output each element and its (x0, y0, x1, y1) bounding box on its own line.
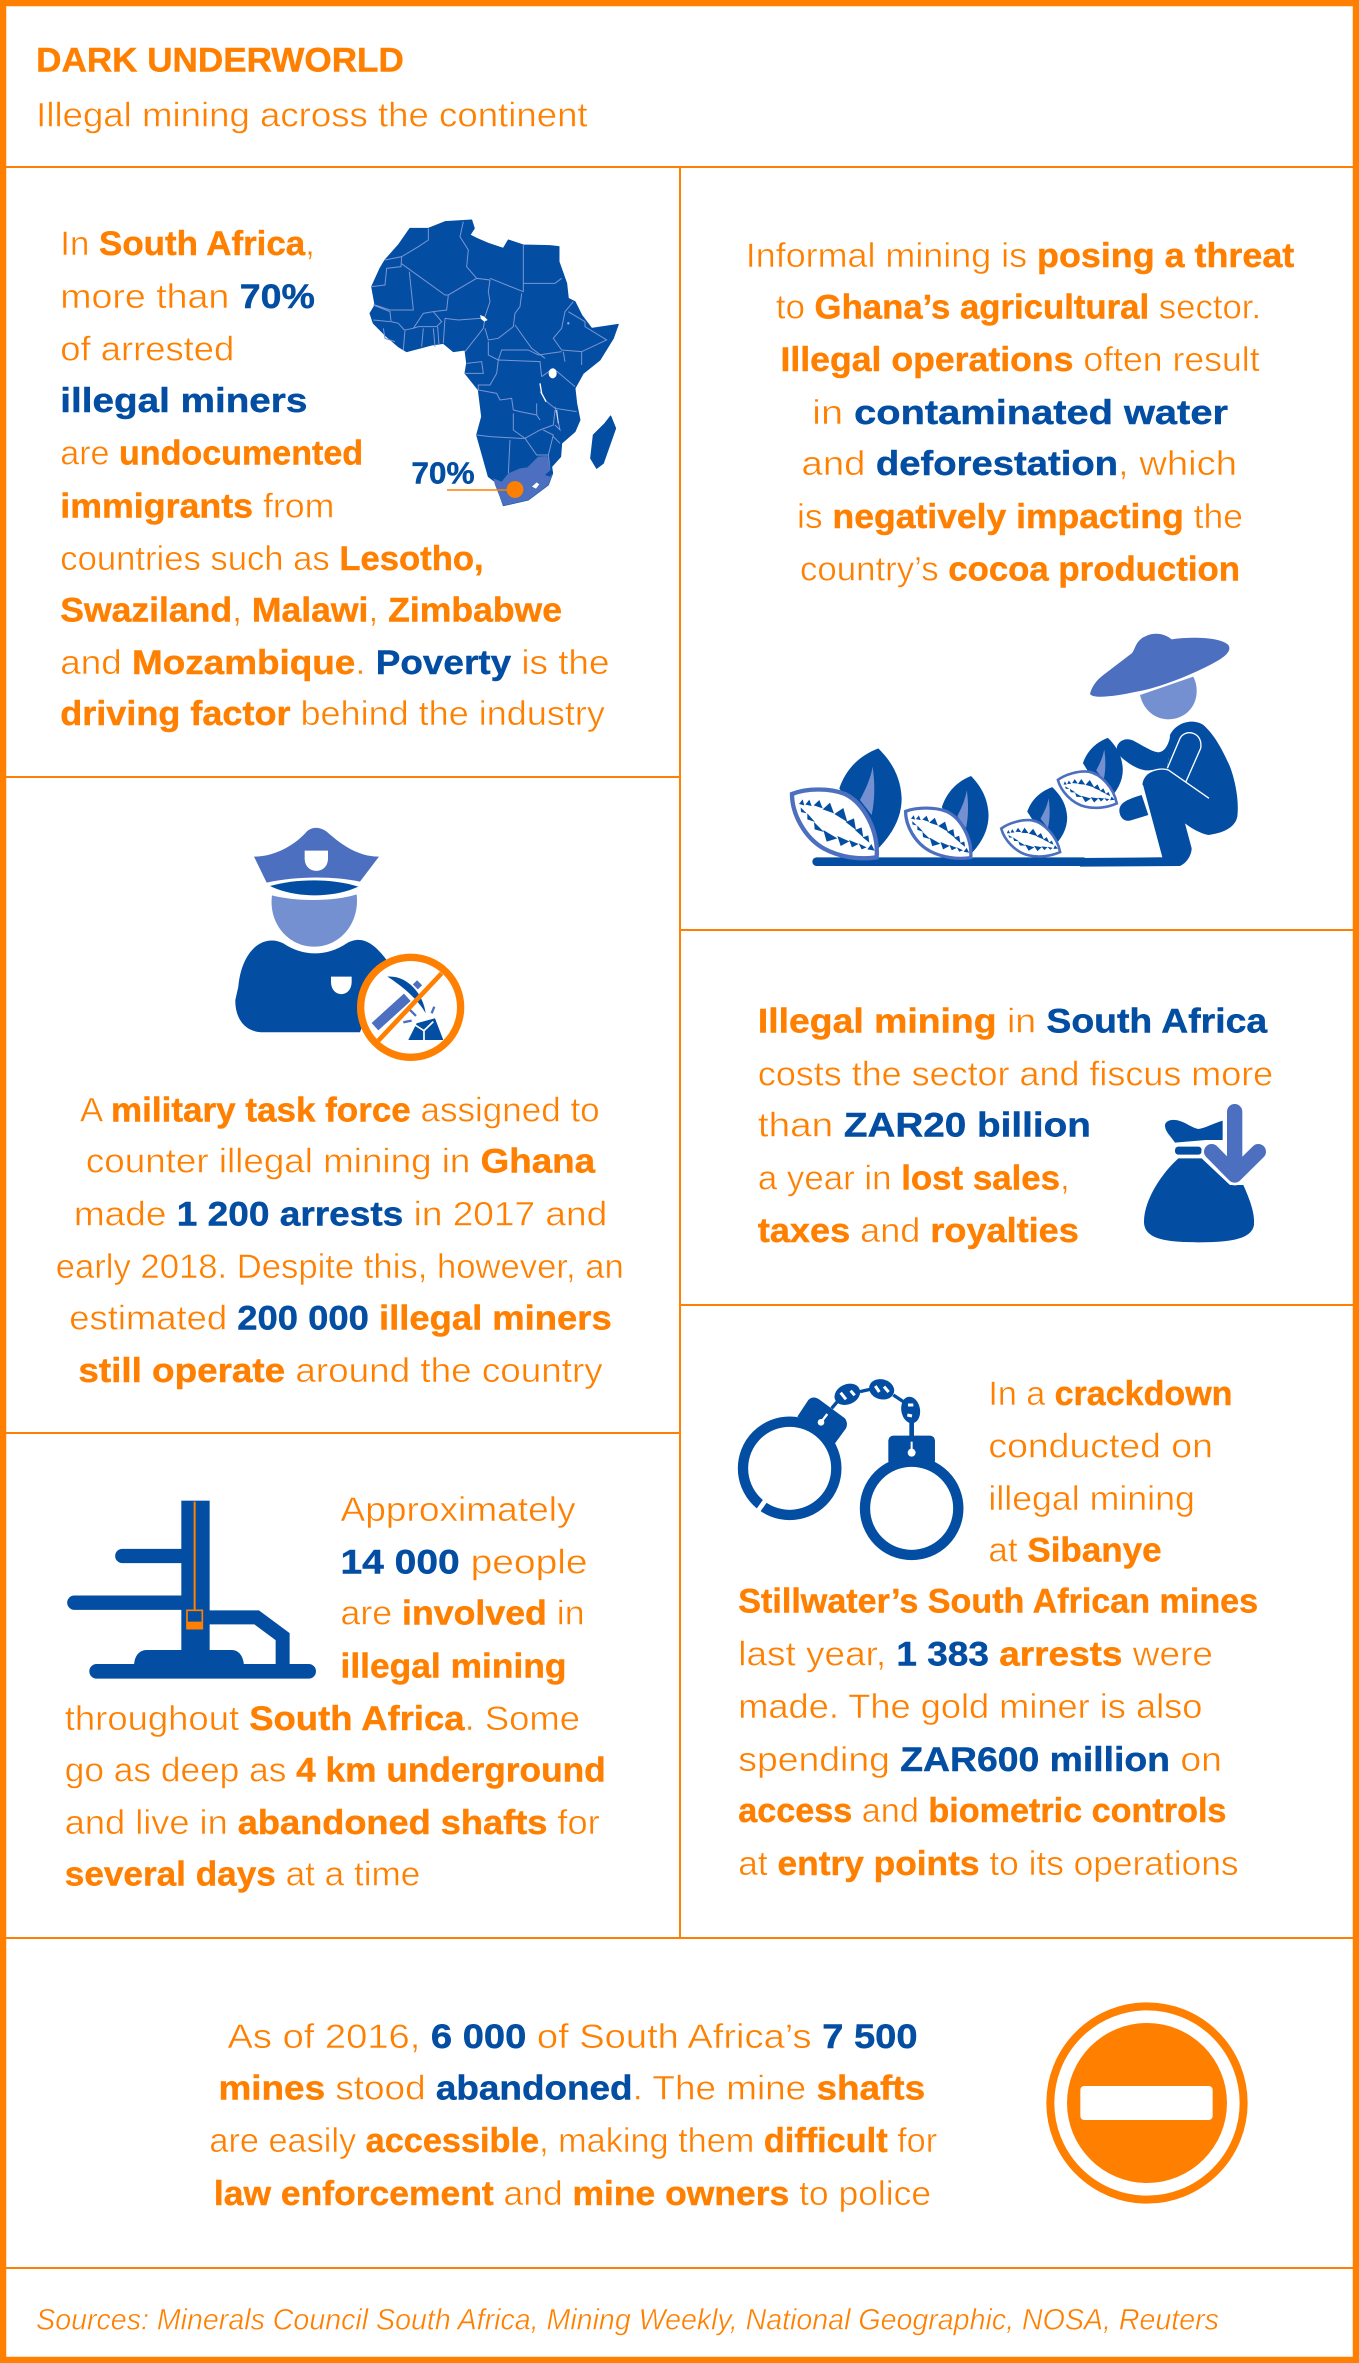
text block: 14 000 people illegal mining (65, 1491, 606, 1893)
text block: Sibanye Stillwater crackdown: illegal mining (988, 1480, 1195, 1518)
icon: crossed-out pickaxe (361, 957, 461, 1057)
icon: mine lift (187, 1502, 202, 1629)
title (36, 42, 588, 135)
text block: Ghana agriculture threat: Informal mining is posing a threat (746, 237, 1294, 275)
text block: Sibanye Stillwater crackdown: conducted on (988, 1427, 1213, 1465)
text block: abandoned mines: mines stood abandoned . The mine shafts (218, 2069, 925, 2107)
icon: down arrow (1212, 1112, 1258, 1175)
icon: handcuffs (743, 1379, 958, 1555)
text block: 14 000 people illegal mining: go as deep as 4 km underground (65, 1751, 606, 1789)
text block: Sibanye Stillwater crackdown: at entry points to its operations (738, 1845, 1239, 1883)
text block: South Africa undocumented immigrants: immigrants from (60, 487, 334, 525)
title: Illegal mining across the continent (36, 97, 588, 135)
text block: 14 000 people illegal mining: are involved in (341, 1595, 585, 1633)
text block: Ghana agriculture threat: to Ghana’s agricultural sector. (776, 288, 1261, 326)
text block: South Africa undocumented immigrants: and Mozambique . Poverty is the (60, 644, 609, 682)
text block: ZAR20 billion cost: taxes and royalties (758, 1212, 1079, 1250)
text block: South Africa undocumented immigrants: more than 70% (60, 278, 315, 316)
icon: mine shaft (74, 1501, 309, 1671)
text block: Sibanye Stillwater crackdown: spending ZAR600 million on (738, 1741, 1222, 1779)
text block: military task force Ghana: A military task force assigned to (80, 1091, 600, 1129)
text block: Sibanye Stillwater crackdown: made. The gold miner is also (738, 1688, 1202, 1726)
text block: South Africa undocumented immigrants: of arrested (60, 331, 234, 369)
text block: 14 000 people illegal mining: and live in abandoned shafts for (65, 1804, 600, 1842)
callout: 70% marker (411, 458, 523, 498)
title: DARK UNDERWORLD (36, 42, 404, 80)
icon: farmer figure (1080, 634, 1238, 867)
text block: ZAR20 billion cost: Illegal mining in South Africa (758, 1003, 1268, 1041)
text block: Sibanye Stillwater crackdown: access and biometric controls (738, 1792, 1226, 1830)
text block: military task force Ghana: early 2018. Despite this, however, an (56, 1248, 624, 1286)
text block: 14 000 people illegal mining: illegal mining (341, 1647, 567, 1685)
text block: military task force Ghana: still operate around the country (78, 1352, 603, 1390)
text block: abandoned mines: are easily accessible, making them difficult for (209, 2122, 937, 2160)
text block: ZAR20 billion cost: than ZAR20 billion (758, 1107, 1091, 1145)
text block: military task force Ghana (56, 1091, 624, 1390)
text block: Sibanye Stillwater crackdown: In a crackdown (988, 1375, 1232, 1413)
text block: ZAR20 billion cost (758, 1003, 1273, 1250)
text block: South Africa undocumented immigrants: Swaziland , Malawi, Zimbabwe (60, 591, 562, 629)
text block: Sibanye Stillwater crackdown: Stillwater’s South African mines (738, 1583, 1258, 1621)
icon: cocoa farmer (792, 634, 1238, 867)
text block: Ghana agriculture threat: in contaminated water (812, 394, 1228, 432)
text block: military task force Ghana: estimated 200 000 illegal miners (69, 1299, 612, 1337)
icon: map of Africa (370, 220, 618, 506)
icon: money bag with down arrow (1144, 1112, 1258, 1242)
text block: South Africa undocumented immigrants: are undocumented (60, 435, 363, 473)
text block: South Africa undocumented immigrants: countries such as Lesotho, (60, 540, 484, 578)
text block: military task force Ghana: made 1 200 arrests in 2017 and (74, 1195, 607, 1233)
text block: South Africa undocumented immigrants: illegal miners (60, 382, 307, 420)
text block: ZAR20 billion cost: a year in lost sales, (758, 1159, 1070, 1197)
text block: Ghana agriculture threat: and deforestation , which (802, 445, 1237, 483)
icon: handcuff chain (832, 1379, 920, 1437)
text block: abandoned mines: law enforcement and mine owners to police (214, 2175, 931, 2213)
text block: Sibanye Stillwater crackdown (738, 1375, 1258, 1883)
sources: Sources: Minerals Council South Africa, Mining Weekly, National Geographic, NOSA, Reuters (36, 2303, 1219, 2336)
text block: abandoned mines (209, 2018, 937, 2213)
icon: cocoa pods (792, 738, 1123, 866)
text block: Ghana agriculture threat: is negatively impacting the (797, 498, 1243, 536)
text block: South Africa undocumented immigrants: In South Africa, (60, 225, 315, 263)
text block: Sibanye Stillwater crackdown: at Sibanye (988, 1531, 1162, 1569)
text block: South Africa undocumented immigrants (60, 225, 609, 733)
callout: 70% marker: 70% (411, 458, 475, 491)
icon: no entry sign (1050, 2006, 1244, 2200)
text block: abandoned mines: As of 2016, 6 000 of South Africa’s 7 500 (228, 2018, 918, 2056)
text block: military task force Ghana: counter illegal mining in Ghana (86, 1143, 596, 1181)
text block: ZAR20 billion cost: costs the sector and fiscus more (758, 1055, 1273, 1093)
text block: Sibanye Stillwater crackdown: last year, 1 383 arrests were (738, 1635, 1213, 1673)
text block: Ghana agriculture threat: country’s cocoa production (800, 551, 1240, 589)
text block: 14 000 people illegal mining: several days at a time (65, 1855, 420, 1893)
text block: 14 000 people illegal mining: 14 000 people (341, 1544, 588, 1582)
text block: Ghana agriculture threat (746, 237, 1294, 589)
text block: South Africa undocumented immigrants: driving factor behind the industry (60, 695, 605, 733)
icon: police officer with no-mining sign (235, 828, 461, 1057)
text block: 14 000 people illegal mining: throughout South Africa . Some (65, 1700, 580, 1738)
text block: 14 000 people illegal mining: Approximately (341, 1491, 576, 1529)
text block: Ghana agriculture threat: Illegal operations often result (780, 341, 1260, 379)
